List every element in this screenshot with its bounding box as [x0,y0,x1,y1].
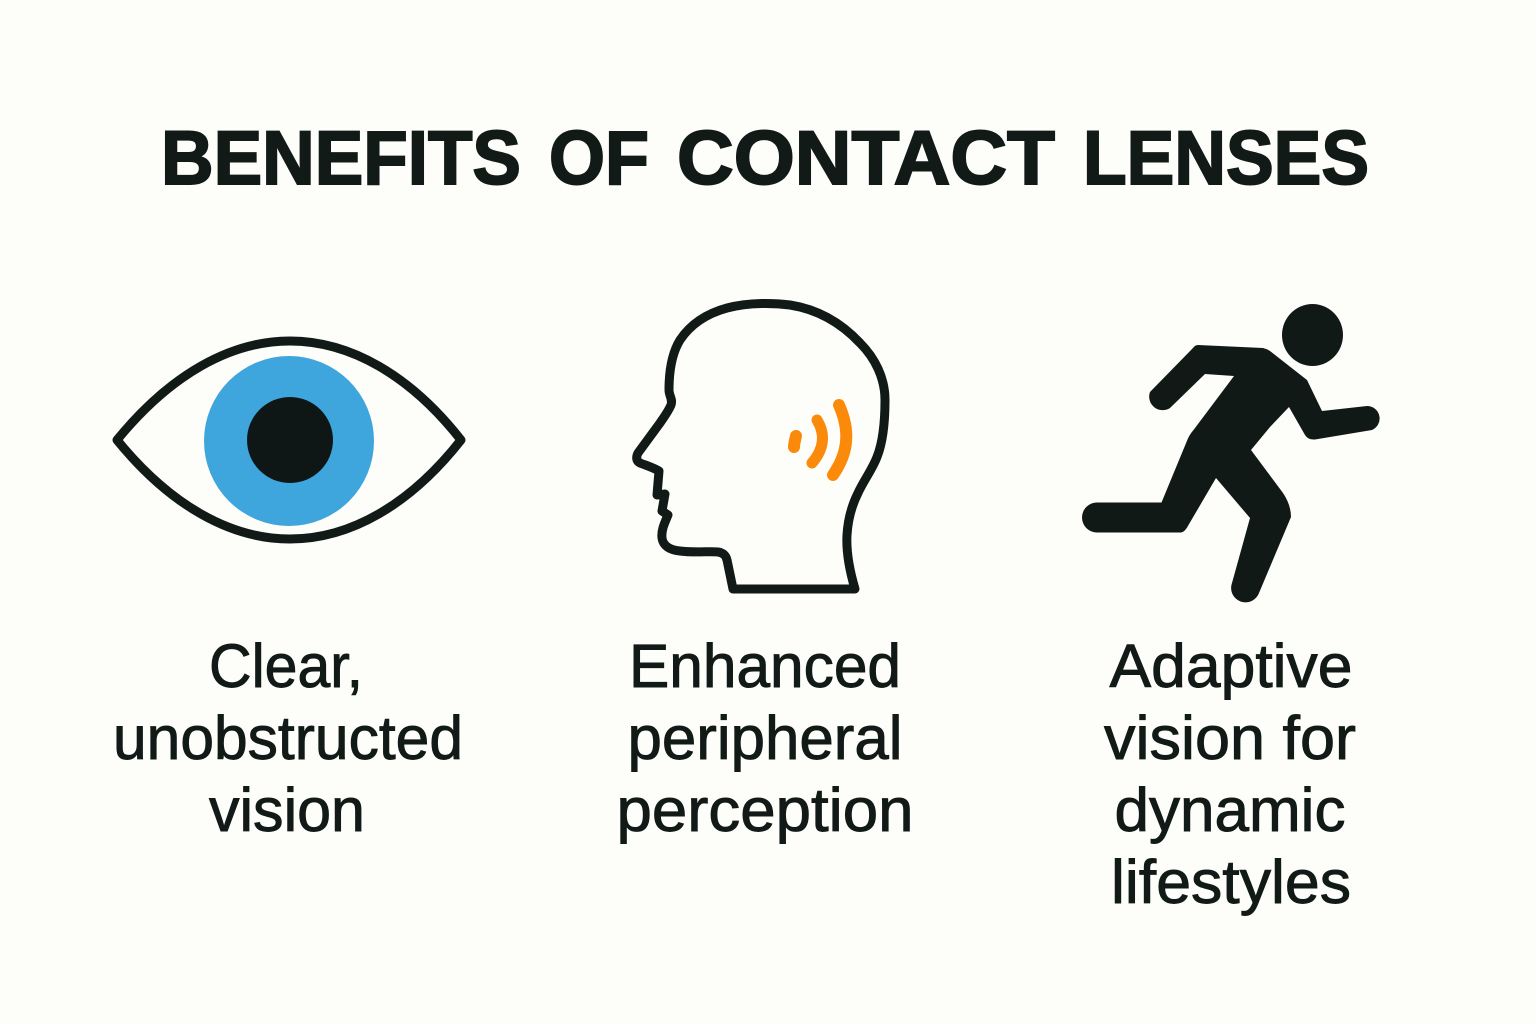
signal waves [794,405,846,475]
icon: head with signal waves [637,303,885,589]
caption: peripheral perception: Enhanced [629,632,901,700]
title: OF [549,116,649,201]
caption: adaptive vision: lifestyles [1111,848,1351,916]
title: BENEFITS [161,116,521,201]
caption: clear vision: vision [209,776,365,844]
caption: clear vision: unobstructed [113,704,463,772]
caption: adaptive vision: dynamic [1114,776,1346,844]
title [161,116,1369,201]
caption: peripheral perception: peripheral [628,704,902,772]
caption: clear vision: Clear, [209,632,363,700]
caption: adaptive vision: vision for [1104,704,1356,772]
caption: peripheral perception [616,632,914,844]
caption: adaptive vision [1104,632,1356,916]
caption: clear vision [113,632,463,844]
caption: peripheral perception: perception [616,776,914,844]
icon: running figure [1082,304,1380,602]
title: CONTACT [677,116,1055,201]
title: LENSES [1083,116,1369,201]
icon: eye [117,341,461,539]
caption: adaptive vision: Adaptive [1110,632,1352,700]
